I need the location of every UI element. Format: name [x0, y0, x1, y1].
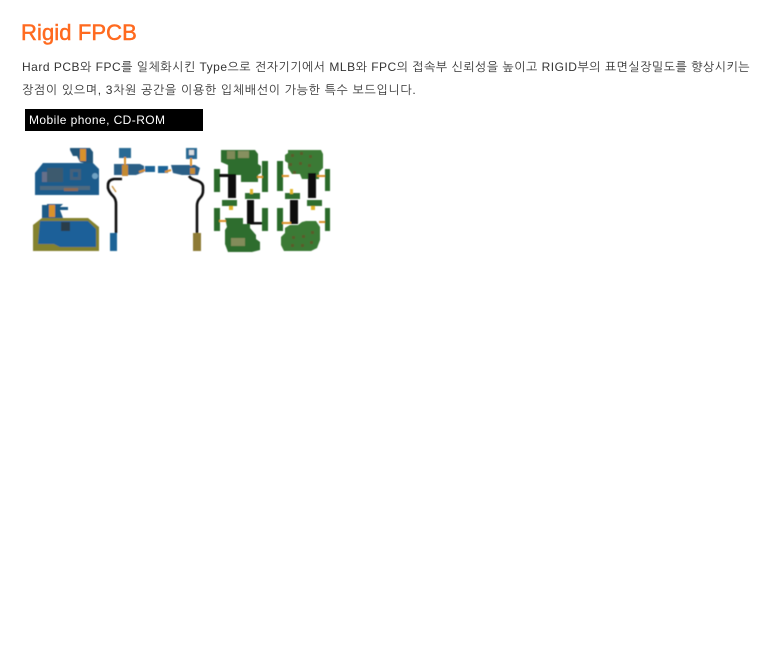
- application label bar: Mobile phone, CD-ROM: [29, 113, 165, 127]
- description text block: [22, 60, 750, 97]
- description text block: Hard PCB와 FPC를 일체화시킨 Type으로 전자기기에서 MLB와 FPC의 접속부 신뢰성을 높이고 RIGID부의 표면실장밀도를 향상시키는: [22, 60, 750, 74]
- board: blue top board: [35, 148, 99, 195]
- board: green assembly right: [277, 150, 330, 251]
- board: green assembly left: [214, 150, 268, 252]
- description text block: 장점이 있으며, 3차원 공간을 이용한 입체배선이 가능한 특수 보드입니다.: [22, 83, 416, 97]
- application label bar: [25, 109, 203, 131]
- flex cable: left: [108, 148, 155, 251]
- flex cable: right: [158, 148, 203, 251]
- product photo: rigid flex boards: [32, 147, 331, 253]
- board: blue and olive lower board: [33, 204, 99, 251]
- title: Rigid FPCB: [21, 20, 137, 45]
